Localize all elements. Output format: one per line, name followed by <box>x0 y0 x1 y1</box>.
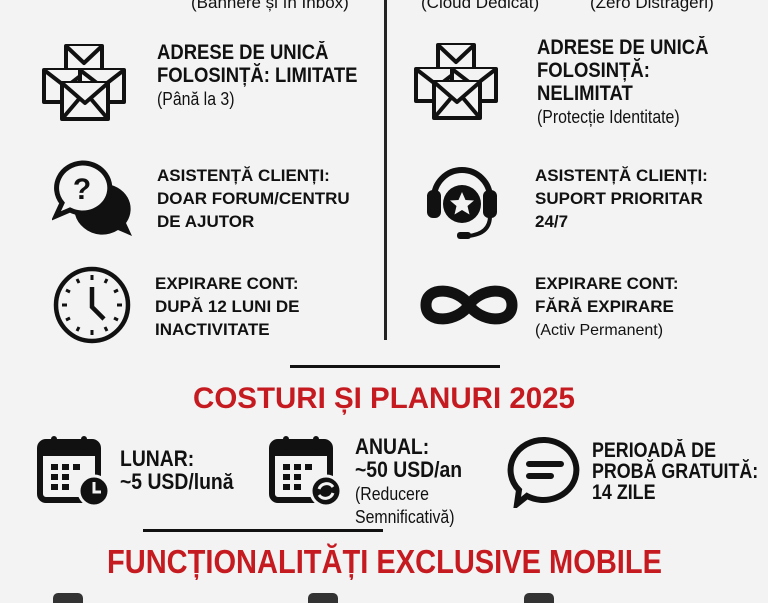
text: trial: PROBĂ GRATUITĂ: <box>592 460 758 483</box>
icon: calendar annual <box>269 436 340 504</box>
icon: speech bubble <box>508 437 580 508</box>
text: anual: Semnificativă) <box>355 507 454 527</box>
partial icons bottom <box>53 593 554 603</box>
text: anual: (Reducere <box>355 484 429 504</box>
icon: chat question: ? <box>73 173 91 206</box>
text: adrese right: ADRESE DE UNICĂ <box>537 36 708 59</box>
text: asistenta right: ASISTENȚĂ CLIENȚI: <box>535 166 708 185</box>
text: adrese left: (Până la 3) <box>157 89 234 109</box>
text: expirare left <box>155 274 300 339</box>
icon: headset star <box>427 167 497 239</box>
icon: clock <box>54 266 130 344</box>
text: asistenta left: DE AJUTOR <box>157 212 254 231</box>
top partial subtitles <box>191 0 714 12</box>
divider vertical <box>384 0 387 340</box>
text: adrese left: FOLOSINȚĂ: LIMITATE <box>157 64 358 87</box>
text: expirare right: (Activ Permanent) <box>535 322 663 339</box>
text: asistenta right: SUPORT PRIORITAR <box>535 189 703 208</box>
text: asistenta right <box>535 166 708 231</box>
text: trial: 14 ZILE <box>592 481 655 504</box>
heading: mobile: FUNCȚIONALITĂȚI EXCLUSIVE MOBILE <box>107 543 662 580</box>
text: asistenta right: 24/7 <box>535 212 568 231</box>
text: lunar: ~5 USD/lună <box>120 469 234 494</box>
text: trial <box>592 439 758 504</box>
icon: envelopes left <box>42 44 126 121</box>
text: asistenta left: ASISTENȚĂ CLIENȚI: <box>157 166 330 185</box>
text: adrese left: ADRESE DE UNICĂ <box>157 41 328 64</box>
text: trial: PERIOADĂ DE <box>592 439 716 462</box>
divider <box>290 365 500 368</box>
heading: costuri: COSTURI ȘI PLANURI 2025 <box>193 382 575 415</box>
text: lunar <box>120 446 234 494</box>
text: adrese right <box>537 36 708 127</box>
text: expirare left: INACTIVITATE <box>155 320 270 339</box>
text: lunar: LUNAR: <box>120 446 194 471</box>
text: expirare right: FĂRĂ EXPIRARE <box>535 297 674 316</box>
icon: envelopes right <box>414 43 498 120</box>
icon: infinity <box>420 286 518 324</box>
text: expirare left: DUPĂ 12 LUNI DE <box>155 297 300 316</box>
text: expirare right: EXPIRARE CONT: <box>535 274 679 293</box>
text: adrese right: FOLOSINȚĂ: <box>537 59 650 82</box>
text: adrese right: NELIMITAT <box>537 82 633 105</box>
text: anual: ~50 USD/an <box>355 457 462 482</box>
text: expirare left: EXPIRARE CONT: <box>155 274 299 293</box>
text: adrese right: (Protecție Identitate) <box>537 107 680 127</box>
text: anual: ANUAL: <box>355 434 429 459</box>
text: expirare right <box>535 274 679 339</box>
text: anual <box>355 434 462 527</box>
text: asistenta left: DOAR FORUM/CENTRU <box>157 189 350 208</box>
divider <box>143 529 383 532</box>
text: asistenta left <box>157 166 350 231</box>
text: adrese left <box>157 41 358 109</box>
icon: chat question <box>52 160 132 236</box>
icon: calendar monthly <box>37 436 108 504</box>
